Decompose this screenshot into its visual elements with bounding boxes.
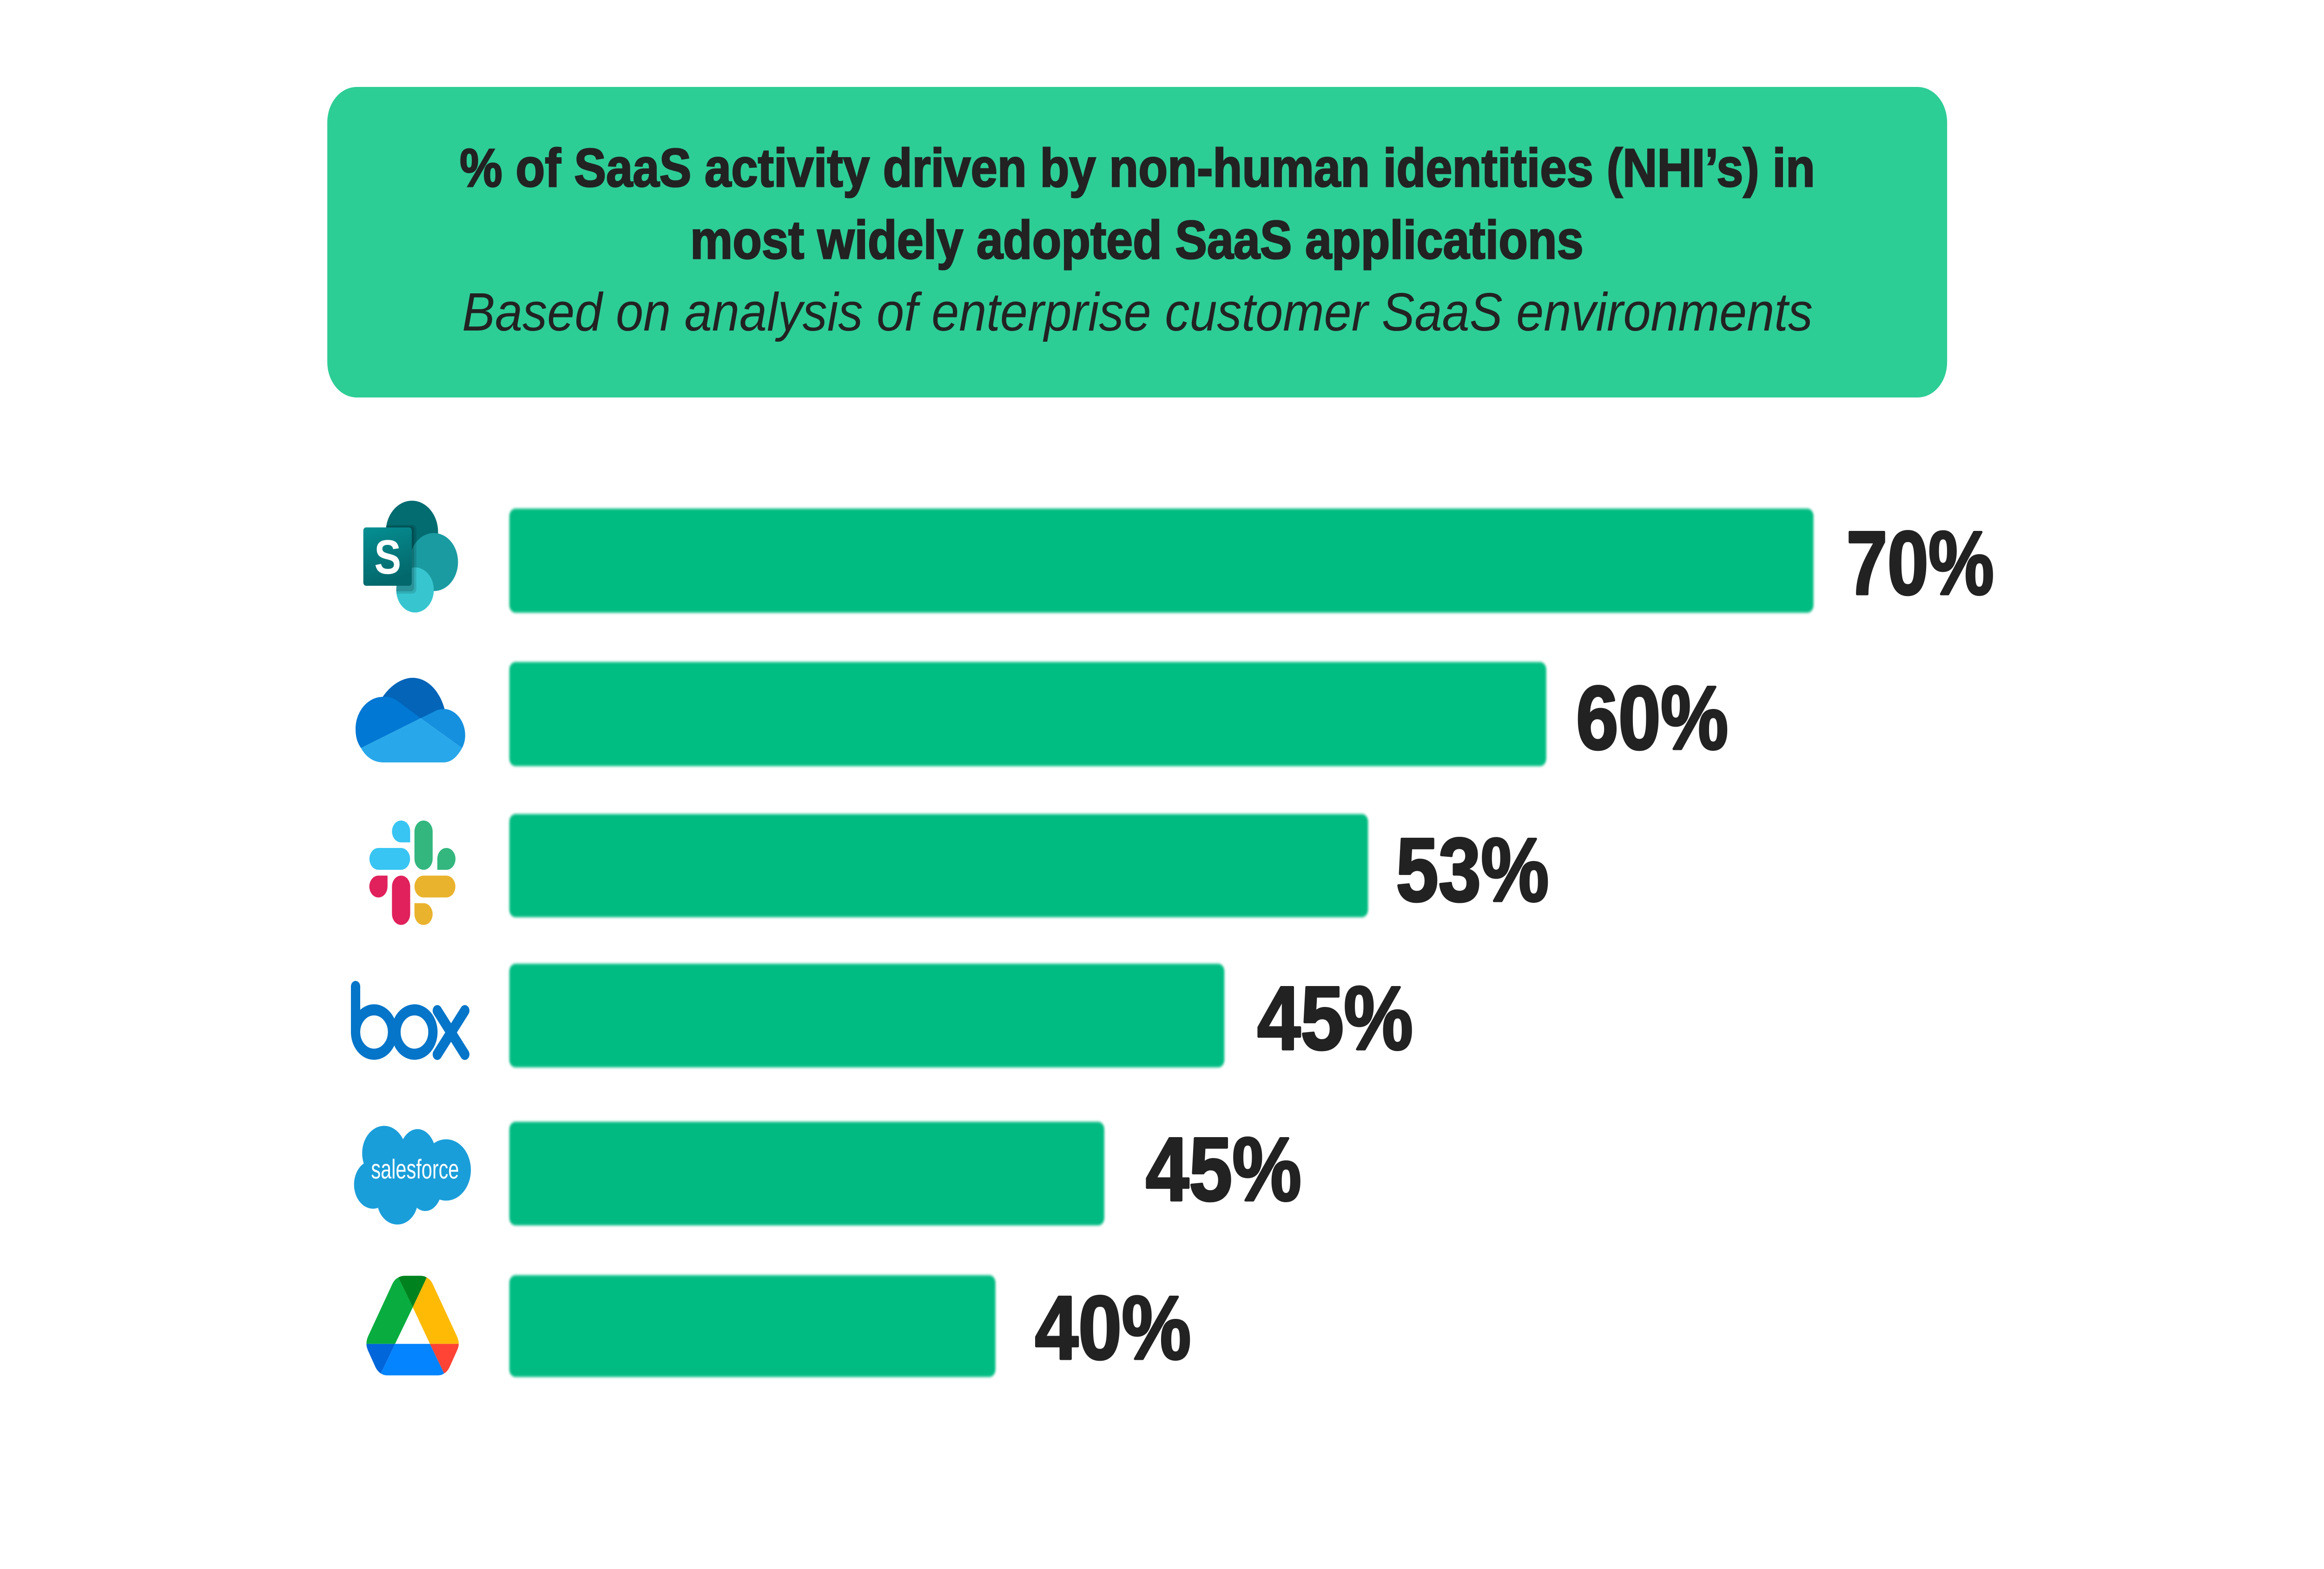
bar: Salesforce bbox=[509, 1122, 1104, 1225]
subtitle: Based on analysis of enterprise customer SaaS environments bbox=[462, 282, 1813, 342]
title line 1: % of SaaS activity driven by non-human identities (NHI’s) in bbox=[460, 138, 1815, 198]
icon: SharePoint bbox=[363, 501, 458, 613]
icon: SharePoint: S bbox=[374, 530, 401, 584]
title line 2: most widely adopted SaaS applications bbox=[690, 210, 1584, 270]
icon: Google Drive bbox=[366, 1276, 459, 1375]
title panel bbox=[327, 87, 1947, 397]
bar: OneDrive bbox=[509, 662, 1546, 766]
icon: Box bbox=[356, 986, 465, 1054]
chart infographic bbox=[327, 87, 1993, 1379]
icon: Slack bbox=[370, 821, 456, 925]
bar: Google Drive bbox=[509, 1275, 996, 1377]
value: 70%: 70% bbox=[1846, 512, 1994, 613]
value: 45% (Salesforce): 45% bbox=[1146, 1119, 1301, 1219]
icon: Salesforce: salesforce bbox=[371, 1155, 459, 1185]
icon: Salesforce bbox=[354, 1126, 471, 1225]
value: 53%: 53% bbox=[1396, 819, 1549, 920]
value: 40%: 40% bbox=[1035, 1277, 1191, 1378]
value: 45% (Box): 45% bbox=[1257, 967, 1413, 1068]
bar: SharePoint bbox=[509, 509, 1814, 613]
bar: Box bbox=[509, 964, 1224, 1067]
icon: OneDrive bbox=[356, 678, 465, 762]
bar: Slack bbox=[509, 814, 1368, 917]
value: 60%: 60% bbox=[1576, 667, 1728, 768]
